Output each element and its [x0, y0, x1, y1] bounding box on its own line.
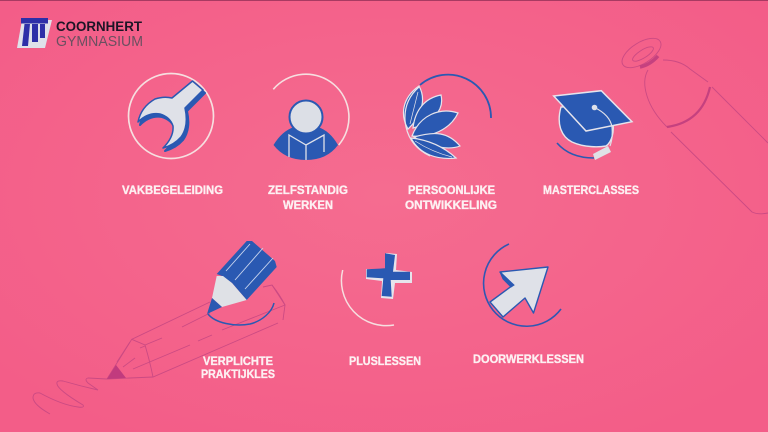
label: vakbegeleiding: VAKBEGELEIDING [122, 183, 223, 197]
icon: lotus [403, 75, 491, 158]
label: persoonlijke ontwikkeling: PERSOONLIJKE [408, 183, 495, 197]
label: zelfstandig werken: WERKEN [283, 198, 333, 212]
icon: blue pencil [207, 241, 277, 325]
label: zelfstandig werken: ZELFSTANDIG [268, 183, 348, 197]
illustration: bottle outline [617, 32, 768, 214]
label: doorwerklessen: DOORWERKLESSEN [473, 352, 584, 366]
illustration: pale pencil and squiggle [33, 285, 285, 414]
icon: wrench [128, 74, 214, 158]
label: persoonlijke ontwikkeling: ONTWIKKELING [405, 198, 497, 212]
label: masterclasses: MASTERCLASSES [543, 183, 639, 197]
label: verplichte praktijkles [201, 354, 275, 381]
label: verplichte praktijkles: PRAKTIJKLES [201, 367, 275, 381]
logo: GYMNASIUM [56, 33, 143, 50]
icon: reader [273, 74, 349, 160]
label: zelfstandig werken [268, 183, 348, 212]
icon: plus [341, 253, 412, 326]
icon: arrow [484, 244, 561, 326]
logo [17, 18, 143, 50]
label: pluslessen: PLUSLESSEN [349, 354, 421, 368]
label: verplichte praktijkles: VERPLICHTE [203, 354, 273, 368]
label: persoonlijke ontwikkeling [405, 183, 497, 212]
icon: graduation cap [554, 91, 632, 160]
logo: COORNHERT [56, 19, 143, 34]
